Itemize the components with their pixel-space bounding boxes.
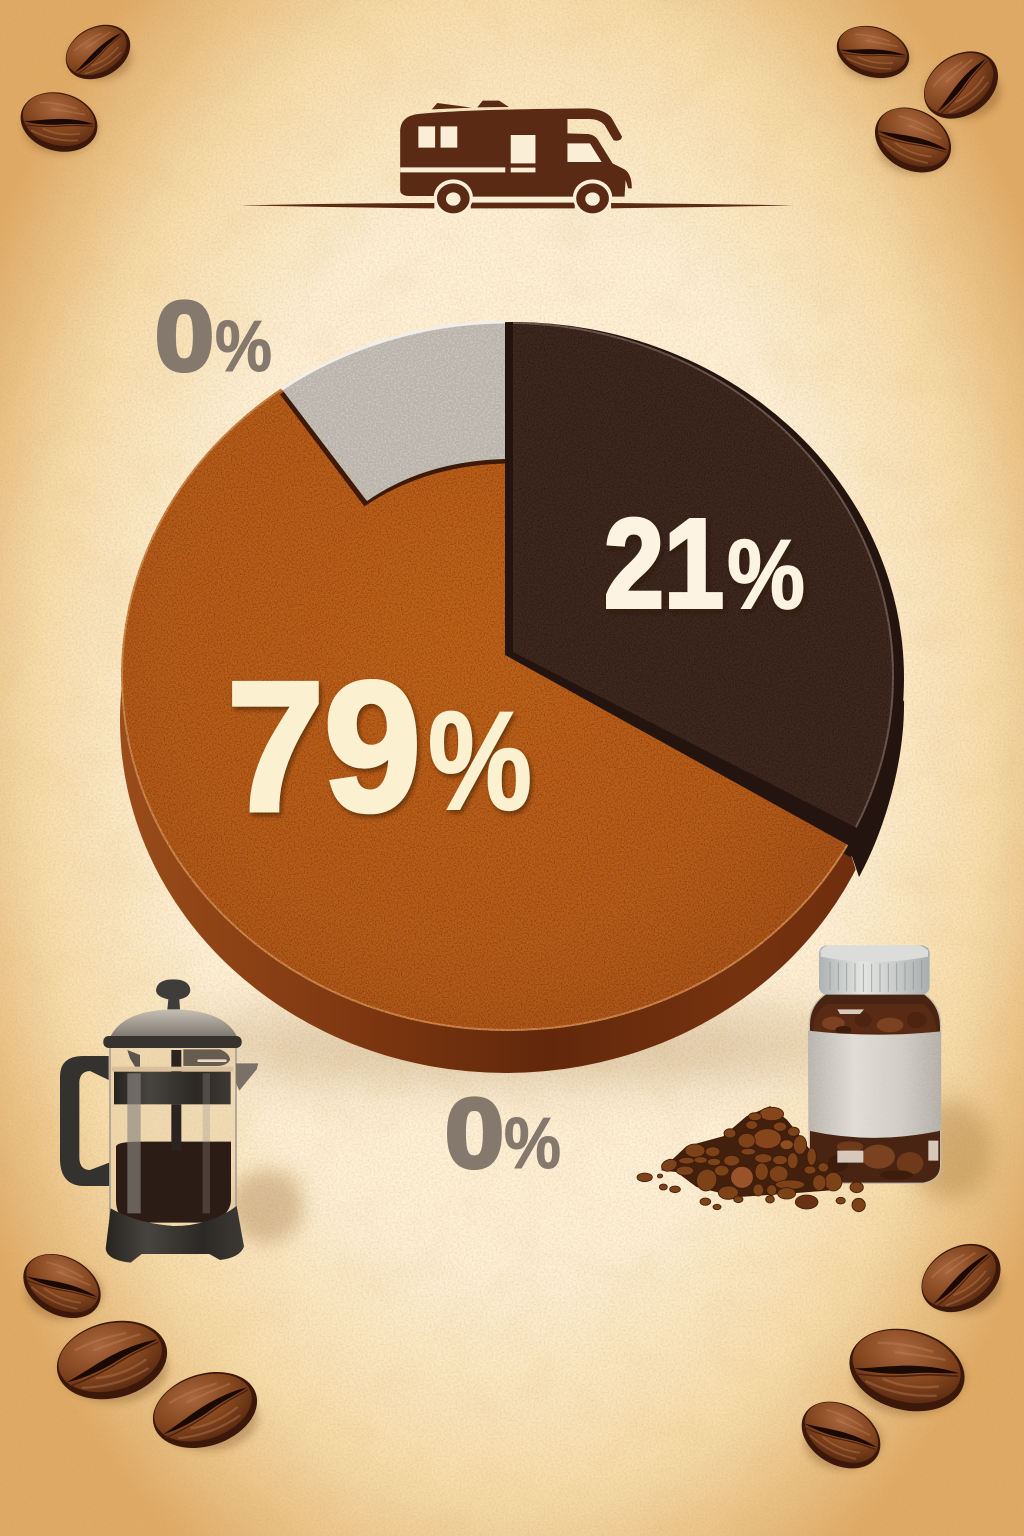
pile of coffee granules [637, 1107, 865, 1212]
spout [236, 1063, 258, 1091]
pie side: orange [120, 690, 856, 1073]
beans: top right [831, 18, 1011, 185]
label: 0% top: 0 [155, 281, 214, 391]
label: 0% top: % [215, 307, 272, 387]
coffee [116, 1142, 231, 1223]
label: 0% bottom: % [504, 1104, 561, 1184]
lid rim [103, 1036, 242, 1048]
label: 0% top [155, 281, 272, 391]
slice: grey [280, 320, 505, 506]
highlights [837, 1009, 938, 1163]
label: 21% [604, 493, 805, 634]
label: 21%: % [727, 519, 805, 629]
pie side: dark [505, 322, 904, 877]
cap [819, 945, 930, 995]
label: 21%: 21 [604, 493, 724, 634]
coffee granules inside jar [822, 1012, 927, 1180]
handle [60, 1056, 109, 1186]
jar shadow [908, 1100, 992, 1200]
wheels [434, 179, 612, 215]
icon: French press [60, 979, 303, 1263]
knob [156, 979, 190, 1009]
jar glass [809, 993, 941, 1183]
beans: bottom left [12, 1241, 267, 1461]
RV body [400, 108, 632, 197]
road line [241, 203, 794, 208]
roof vents [432, 101, 509, 109]
label: 79%: % [428, 682, 532, 839]
label [808, 1031, 941, 1138]
pie chart [120, 322, 904, 1073]
slice: 21% dark [513, 322, 894, 828]
label: 0% bottom [445, 1078, 561, 1188]
base [106, 1206, 244, 1263]
icon: coffee jar with granules [637, 945, 941, 1212]
pie shadow [170, 1013, 870, 1077]
slice: 79% orange [121, 388, 848, 1031]
glass [110, 1045, 236, 1220]
press shadow [230, 1170, 303, 1243]
beans: bottom right [790, 1230, 1013, 1482]
beans: top left [14, 14, 140, 160]
icon: RV camper van [241, 101, 794, 215]
windows and stripe [400, 126, 602, 172]
lid [110, 1009, 237, 1037]
label: 79%: 79 [227, 643, 421, 849]
label: 0% bottom: 0 [445, 1078, 504, 1188]
jar coffee top [813, 1004, 937, 1033]
label: 79% [227, 643, 532, 849]
plunger [112, 1049, 233, 1213]
